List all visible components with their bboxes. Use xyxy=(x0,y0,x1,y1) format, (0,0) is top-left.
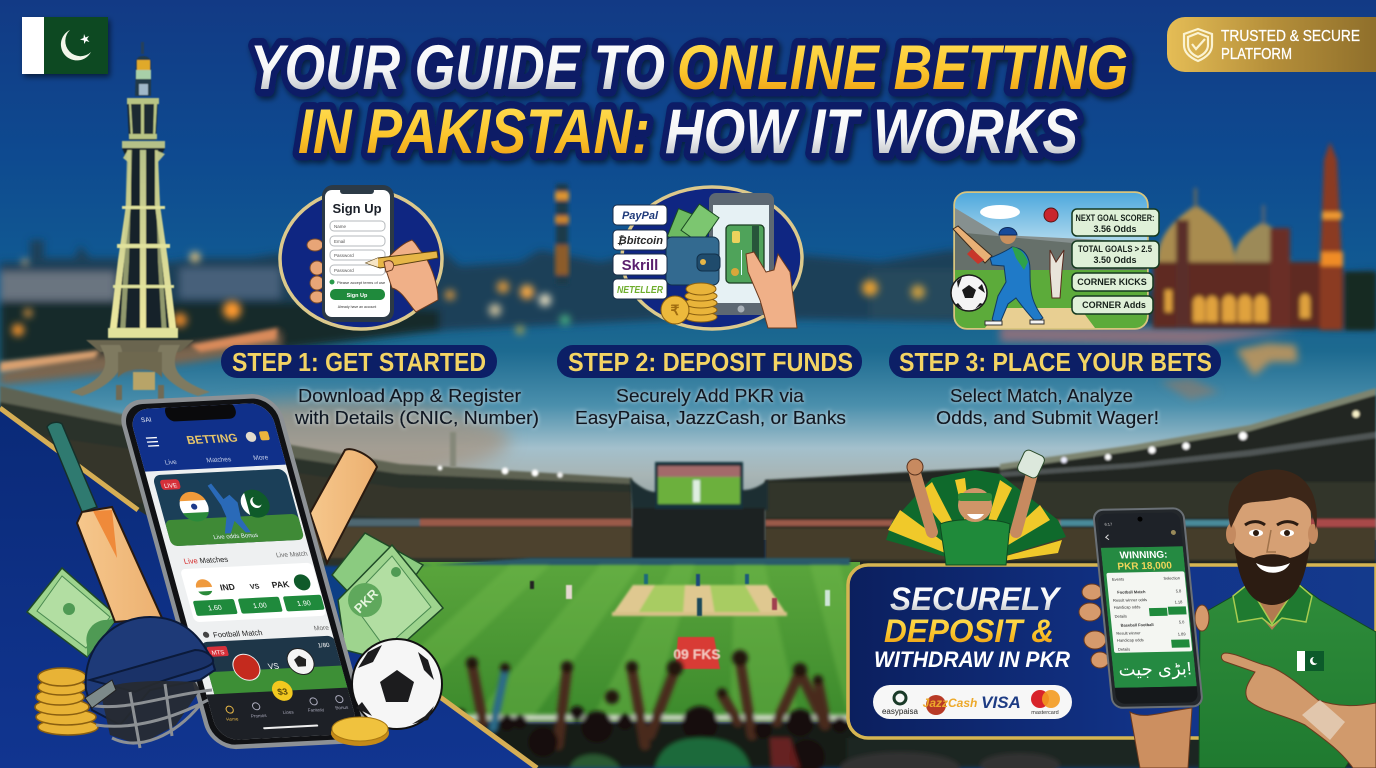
betting slip: 1.89 xyxy=(1178,631,1187,637)
stadium: red field sign: 09 FKS xyxy=(673,646,721,662)
stadium: mowing stripes xyxy=(405,565,860,722)
betting option: next goal scorer: 3.56 Odds xyxy=(1093,224,1137,234)
app tabs: Matches xyxy=(206,456,233,464)
icon: hand holding phone xyxy=(746,252,797,328)
form field labels: Name xyxy=(334,224,347,229)
app tabs: Live xyxy=(164,459,178,466)
stadium: red field sign xyxy=(673,637,721,669)
betting slip: Selection xyxy=(1163,575,1180,581)
odds buttons: 1.60 xyxy=(207,604,223,612)
bottom-left navy corner panel xyxy=(0,408,537,768)
step 3 description: Odds, and Submit Wager! xyxy=(936,407,1159,428)
title xyxy=(250,33,1128,167)
winning amount: PKR 18,000 xyxy=(1117,561,1173,573)
football match heading xyxy=(202,626,329,638)
scene: batting strip xyxy=(985,308,1095,328)
step 1 illustration: sign up phone xyxy=(280,185,442,329)
logo: Mastercard: mastercard xyxy=(1031,710,1059,716)
icon: left fingers xyxy=(307,239,324,303)
title: HOW IT WORKS xyxy=(665,97,1078,167)
hero caption: Live odds Bonus xyxy=(213,532,259,541)
man's pointing arm xyxy=(1221,653,1376,768)
phone green screen xyxy=(1101,546,1197,688)
scene: stands xyxy=(955,208,1114,243)
odds buttons: 1.90 xyxy=(296,599,312,608)
timer: 1/80 xyxy=(317,642,331,649)
betting option: total goals: 3.50 Odds xyxy=(1093,255,1137,265)
step 2 illustration: wallet and deposit phone xyxy=(613,187,802,329)
logo: JazzCash: JazzCash xyxy=(923,696,977,710)
step 1 heading: STEP 1: GET STARTED xyxy=(232,347,486,377)
step 1 description: with Details (CNIC, Number) xyxy=(294,407,539,428)
title: ONLINE BETTING xyxy=(677,33,1128,103)
betting slip: Handicap odds xyxy=(1117,637,1144,643)
icon: cricket batter xyxy=(953,226,1044,325)
logo: Mastercard xyxy=(1031,690,1060,716)
team India xyxy=(196,579,234,596)
flag of Pakistan xyxy=(22,17,108,74)
icon: rupee coin: ₹ xyxy=(671,302,680,318)
step 2 description: EasyPaisa, JazzCash, or Banks xyxy=(575,407,846,428)
icon: cricket bat left xyxy=(47,422,162,622)
icon: coin stack xyxy=(685,283,717,322)
phone camera and back arrow: 6:17 xyxy=(1104,522,1113,527)
form field labels: Password xyxy=(334,268,354,273)
stadium: cricket field xyxy=(400,562,860,722)
betting slip: 5.8 xyxy=(1175,588,1182,594)
payment logo: Skrill xyxy=(613,254,667,275)
football match heading: Football Match xyxy=(212,628,264,639)
man's phone fingers xyxy=(1079,584,1209,668)
football match card xyxy=(203,636,350,696)
logo: easypaisa: easypaisa xyxy=(882,707,919,716)
background: distant minaret xyxy=(555,184,569,284)
form field labels: Password xyxy=(334,253,354,258)
betting slip: Handicap odds xyxy=(1114,604,1141,610)
mobile betting app phone xyxy=(118,395,370,748)
betting slip: Baseball Football xyxy=(1120,622,1154,628)
promo headline: SECURELY xyxy=(890,581,1062,617)
live badge: LIVE xyxy=(163,482,178,490)
nav labels: Promos xyxy=(250,713,268,719)
app header icons xyxy=(245,431,270,442)
icon: phone with card xyxy=(709,193,774,315)
form field labels: Email xyxy=(334,239,345,244)
background: dusk sky xyxy=(0,0,1376,540)
see all link: Live Match xyxy=(275,551,309,559)
stadium: giant screen xyxy=(630,462,768,560)
title: YOUR GUIDE TO xyxy=(250,33,665,103)
stadium: advertising boards xyxy=(420,558,850,566)
betting option: next goal scorer xyxy=(1072,209,1159,236)
icon: batsman xyxy=(207,482,251,534)
betting slip: Result winner odds xyxy=(1113,597,1147,603)
small print: Already have an account xyxy=(338,305,376,309)
nav labels: Bonus xyxy=(335,705,349,710)
nav labels: Fantasy xyxy=(307,707,325,713)
nav icons xyxy=(224,695,345,713)
scene: crowd rows xyxy=(955,232,1147,270)
status text: SAI xyxy=(140,417,153,424)
sign up heading: Sign Up xyxy=(332,201,382,216)
sign up button xyxy=(330,289,385,300)
scene: sky xyxy=(955,193,1147,240)
betting option: corner odds xyxy=(1072,296,1153,314)
promo headline: DEPOSIT & xyxy=(884,613,1054,649)
payment logo: Skrill: Skrill xyxy=(622,257,658,274)
icon: writing hand with pencil xyxy=(366,240,438,312)
trusted and secure badge xyxy=(1167,17,1376,72)
icon: gold coin stack xyxy=(35,668,98,735)
promo headline xyxy=(874,581,1070,672)
background: blurred city skyline xyxy=(0,240,1376,385)
background: city lights xyxy=(12,252,1367,336)
background: road light trails xyxy=(0,328,278,372)
landmark: Minar-e-Pakistan tower xyxy=(70,42,210,400)
betting slip: Football Match xyxy=(1117,589,1146,595)
live badge xyxy=(206,646,229,657)
landmark: Badshahi mosque xyxy=(1153,142,1376,330)
app header xyxy=(126,401,288,472)
icon: football xyxy=(352,639,442,729)
icon: football xyxy=(286,648,314,675)
fan celebration burst xyxy=(886,448,1066,565)
icon: India flag xyxy=(180,492,209,522)
icon: cricket bat right xyxy=(310,449,377,563)
icon: banknotes right: PKR xyxy=(351,586,381,616)
nav labels: Lines xyxy=(282,710,295,715)
betting slip: 5.0 xyxy=(1179,619,1185,625)
payment logos pill xyxy=(873,685,1072,719)
man's smile xyxy=(1256,563,1290,573)
scene: grass xyxy=(955,270,1147,328)
odds buttons xyxy=(193,595,325,616)
fan glove xyxy=(1016,448,1046,480)
nav labels: Home xyxy=(226,716,239,722)
man's neck xyxy=(1247,575,1298,630)
live badge: MTS xyxy=(211,649,225,657)
team India: IND xyxy=(219,582,236,592)
icon: cricket helmet xyxy=(85,617,215,748)
payment logo: Neteller: NETELLER xyxy=(617,285,664,296)
sign up button: Sign Up xyxy=(347,293,368,299)
shirt flag badge xyxy=(1297,651,1324,671)
odds buttons: 1.00 xyxy=(252,602,268,610)
football match heading: More xyxy=(313,625,330,632)
badge text: TRUSTED & SECURE xyxy=(1221,28,1360,45)
phone camera and back arrow xyxy=(1104,516,1176,540)
nav labels xyxy=(226,706,348,721)
betting slip: Details xyxy=(1118,647,1130,652)
stadium: left stand xyxy=(0,386,640,566)
betting option: corner kicks: CORNER KICKS xyxy=(1077,277,1147,287)
scene: fielder xyxy=(1050,250,1064,298)
betting slip xyxy=(1106,571,1192,653)
icon: rupee coin xyxy=(661,296,689,324)
stadium: pitch xyxy=(612,585,787,616)
versus: VS xyxy=(249,583,261,591)
form field labels xyxy=(334,224,354,273)
match odds card xyxy=(180,563,326,622)
title: IN PAKISTAN: xyxy=(298,97,650,167)
app tabs: More xyxy=(253,454,270,462)
winning phone xyxy=(1093,508,1203,708)
fan fist xyxy=(907,459,923,475)
logo: VISA: VISA xyxy=(981,693,1021,712)
betting slip: Events xyxy=(1112,577,1124,582)
icon: banknotes xyxy=(667,204,719,245)
phone navigation bar xyxy=(1115,686,1199,706)
phone notch xyxy=(165,404,236,422)
background: warm horizon tint xyxy=(150,400,510,480)
icon: banknote left xyxy=(27,568,118,657)
betting option: corner kicks xyxy=(1072,273,1153,291)
step 2 description: Securely Add PKR via xyxy=(616,385,805,406)
step 1 description: Download App & Register xyxy=(298,385,521,406)
betting slip: Details xyxy=(1114,614,1127,619)
hero match card xyxy=(152,469,305,546)
icon: shield xyxy=(1184,29,1212,61)
betting option: total goals: TOTAL GOALS > 2.5 xyxy=(1078,244,1152,254)
betting slip: Result winner xyxy=(1116,630,1141,636)
icon: team ball xyxy=(232,654,260,681)
background: waterfront reflections xyxy=(1000,326,1300,400)
menu icon xyxy=(146,438,159,446)
icon: football xyxy=(951,275,987,311)
home indicator xyxy=(263,724,318,729)
gold border of corner panel xyxy=(0,408,537,768)
logo: easypaisa xyxy=(882,692,919,716)
phone header xyxy=(1097,512,1183,548)
fan jersey xyxy=(940,520,1010,565)
icon: red cricket ball xyxy=(1044,208,1058,222)
live matches heading: Live Matches xyxy=(183,555,229,566)
icon: central yellow button xyxy=(272,680,293,701)
winning heading: WINNING: xyxy=(1119,550,1168,562)
man's beard xyxy=(1234,545,1310,605)
betting option: total goals xyxy=(1072,241,1159,268)
crowd silhouettes xyxy=(430,650,1376,768)
fan face xyxy=(958,488,992,522)
app title: BETTING xyxy=(185,432,239,447)
step 2 heading: STEP 2: DEPOSIT FUNDS xyxy=(568,347,853,377)
man's collar xyxy=(1233,584,1312,626)
step 3 description: Select Match, Analyze xyxy=(950,385,1133,406)
fan arms xyxy=(914,470,1033,532)
betting slip: 1.18 xyxy=(1174,599,1183,605)
icon: central yellow button: $3 xyxy=(276,687,289,697)
man's head xyxy=(1226,469,1318,605)
promo headline: WITHDRAW IN PKR xyxy=(874,647,1070,672)
bottom-right promo panel xyxy=(848,448,1376,738)
man's hair xyxy=(1228,469,1317,530)
step 3 illustration: cricket betting card xyxy=(951,193,1159,328)
icon: banknotes right xyxy=(332,533,443,660)
man's wristband highlight xyxy=(1302,700,1345,740)
man's lower hand xyxy=(1130,708,1192,768)
badge text: PLATFORM xyxy=(1221,46,1292,63)
icon: wallet xyxy=(666,237,720,285)
urdu big win text: بڑی جیت! xyxy=(1117,658,1193,681)
team Pakistan: PAK xyxy=(270,579,291,590)
payment logo: PayPal: PayPal xyxy=(622,210,659,222)
sign up form fields xyxy=(330,221,385,275)
payment logo: bitcoin: ₿bitcoin xyxy=(617,234,663,247)
man's eyes xyxy=(1245,522,1298,552)
live badge xyxy=(159,479,181,490)
app bottom navigation xyxy=(206,680,355,740)
terms checkbox: Please accept terms of use xyxy=(337,280,386,285)
stadium: right stand xyxy=(438,388,1376,566)
payment logo: PayPal xyxy=(613,205,667,225)
stadium: players on field xyxy=(530,574,830,616)
icon: Pakistan flag xyxy=(240,490,270,518)
team Pakistan xyxy=(272,574,310,590)
scene: cloud xyxy=(980,205,1020,219)
betting option: corner odds: CORNER Adds xyxy=(1082,300,1146,310)
payment logo: Neteller xyxy=(613,279,667,299)
icon: gold coin xyxy=(331,717,389,746)
betting option: next goal scorer: NEXT GOAL SCORER: xyxy=(1076,213,1155,223)
payment logo: bitcoin xyxy=(613,230,667,250)
app tabs xyxy=(164,455,268,464)
man's shirt xyxy=(1199,585,1376,768)
presenter man xyxy=(1079,469,1376,768)
step 3 heading: STEP 3: PLACE YOUR BETS xyxy=(899,347,1212,377)
versus: VS xyxy=(267,662,281,671)
